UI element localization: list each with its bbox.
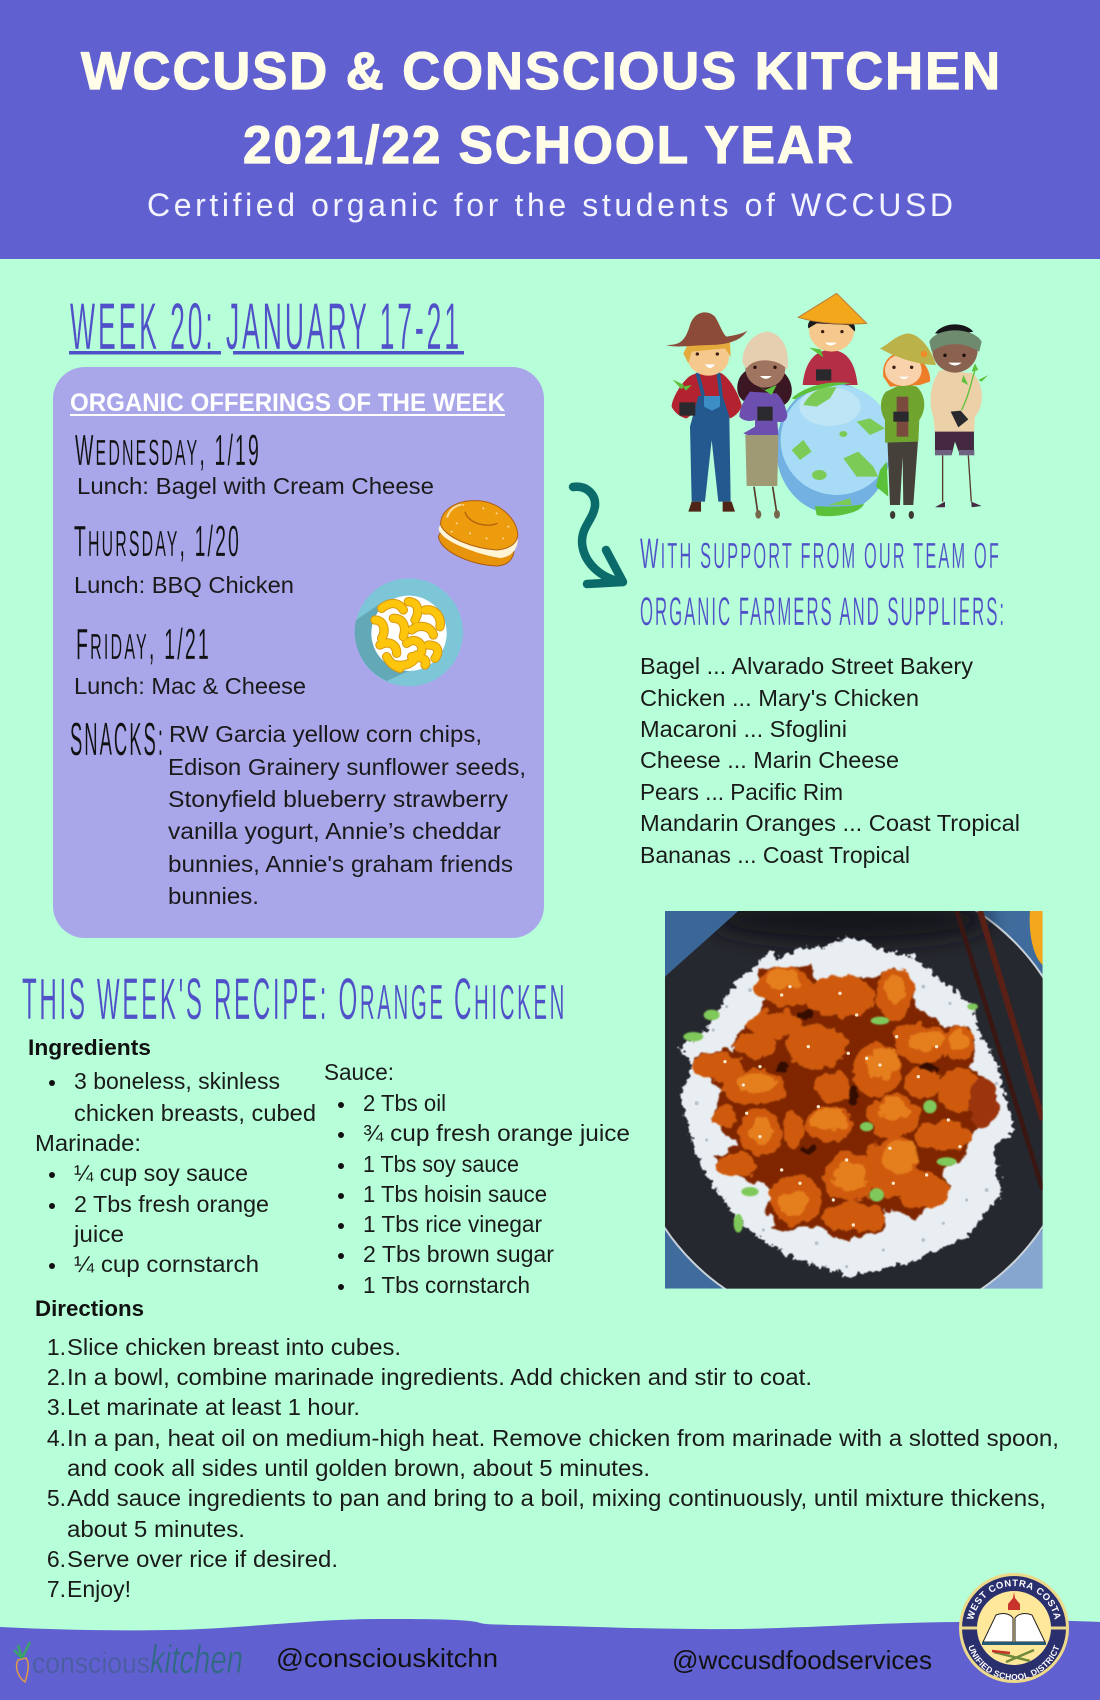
seal: West Contra Costa Unified School District — [959, 1573, 1069, 1683]
title — [81, 42, 1002, 175]
supplier list: Bananas ... Coast Tropical — [640, 842, 910, 868]
supplier list: Pears ... Pacific Rim — [640, 779, 843, 805]
handle: conscious kitchen: @consciouskitchn — [276, 1643, 498, 1673]
directions: 2. — [47, 1364, 66, 1390]
snacks list: Edison Grainery sunflower seeds, — [168, 754, 526, 780]
sauce column: 1 Tbs hoisin sauce — [363, 1181, 547, 1207]
directions — [35, 1296, 1059, 1602]
photo: orange chicken over rice — [665, 911, 1043, 1289]
snacks list: bunnies. — [168, 883, 259, 909]
logo: conscious kitchen: kitchen — [150, 1638, 243, 1682]
directions: Serve over rice if desired. — [67, 1546, 338, 1572]
snacks list: vanilla yogurt, Annie’s cheddar — [168, 818, 501, 844]
directions: 5. — [47, 1485, 66, 1511]
ingredients column: ¼ cup soy sauce — [74, 1160, 248, 1186]
snacks list — [168, 721, 526, 909]
directions: about 5 minutes. — [67, 1516, 245, 1542]
panel heading: ORGANIC OFFERINGS OF THE WEEK — [70, 389, 505, 417]
ingredients column: 2 Tbs fresh orange — [74, 1191, 269, 1217]
sauce column: 2 Tbs brown sugar — [363, 1241, 554, 1267]
Friday menu: Lunch: Mac & Cheese — [74, 673, 306, 699]
sauce column — [324, 1059, 630, 1298]
sauce column: Sauce: — [324, 1059, 394, 1085]
sauce column: 1 Tbs rice vinegar — [363, 1211, 542, 1237]
seal: West Contra Costa Unified School District: UNIFIED SCHOOL DISTRICT — [968, 1644, 1059, 1680]
supplier list: Macaroni ... Sfoglini — [640, 716, 847, 742]
supplier list: Cheese ... Marin Cheese — [640, 747, 899, 773]
Friday menu — [74, 620, 306, 699]
Thursday menu: THURSDAY, 1/20 — [74, 517, 241, 566]
person: farmer in overalls — [666, 312, 747, 512]
ingredients column: juice — [73, 1221, 124, 1247]
globe — [776, 382, 893, 516]
directions: Add sauce ingredients to pan and bring to a boil, mixing continuously, until mixture thickens, — [67, 1485, 1046, 1511]
week heading — [69, 289, 464, 363]
ingredients column — [28, 1035, 316, 1277]
sauce column: 1 Tbs cornstarch — [363, 1272, 530, 1298]
supplier list — [640, 653, 1020, 868]
ingredients column: ¼ cup cornstarch — [74, 1251, 259, 1277]
Wednesday menu — [75, 426, 434, 499]
sauce column: 2 Tbs oil — [363, 1090, 446, 1116]
supplier list: Mandarin Oranges ... Coast Tropical — [640, 810, 1020, 836]
ingredients column: chicken breasts, cubed — [74, 1100, 316, 1126]
seal: West Contra Costa Unified School District: WEST CONTRA COSTA — [966, 1580, 1060, 1620]
snacks list: RW Garcia yellow corn chips, — [169, 721, 482, 747]
recipe heading: THIS WEEK'S RECIPE: ORANGE CHICKEN — [22, 967, 567, 1032]
supplier list: Chicken ... Mary's Chicken — [640, 685, 919, 711]
Wednesday menu: Lunch: Bagel with Cream Cheese — [77, 473, 434, 499]
directions: Slice chicken breast into cubes. — [67, 1334, 401, 1360]
snacks list: bunnies, Annie's graham friends — [168, 851, 513, 877]
directions: 3. — [47, 1394, 66, 1420]
panel: organic offerings: SNACKS: — [70, 713, 165, 765]
header banner — [0, 0, 1100, 259]
snacks list: Stonyfield blueberry strawberry — [168, 786, 509, 812]
person: red shirt behind globe — [798, 293, 867, 385]
directions: In a pan, heat oil on medium-high heat. Remove chicken from marinade with a slotted spoon, — [67, 1425, 1059, 1451]
text: WEEK 20: JANUARY 17-21 — [70, 289, 462, 363]
arrow — [573, 487, 623, 584]
supplier list: Bagel ... Alvarado Street Bakery — [640, 653, 974, 679]
person: green headband — [929, 324, 988, 507]
sauce column: 1 Tbs soy sauce — [363, 1151, 519, 1177]
footer band — [0, 1619, 1100, 1700]
directions: 4. — [47, 1425, 66, 1451]
Friday menu: FRIDAY, 1/21 — [76, 620, 211, 669]
Wednesday menu: WEDNESDAY, 1/19 — [75, 426, 261, 475]
directions: In a bowl, combine marinade ingredients. Add chicken and stir to coat. — [67, 1364, 812, 1390]
ingredients column: Ingredients — [28, 1035, 151, 1060]
directions: 1. — [47, 1334, 66, 1360]
subtitle: Certified organic for the students of WCCUSD — [147, 187, 953, 223]
ingredients column: Marinade: — [35, 1130, 141, 1156]
icon: mac and cheese plate — [355, 578, 463, 686]
ingredients column: 3 boneless, skinless — [74, 1068, 280, 1094]
Thursday menu — [74, 517, 294, 598]
sauce column: ¾ cup fresh orange juice — [363, 1120, 630, 1146]
logo: conscious kitchen: conscious — [32, 1647, 150, 1680]
handle: food services: @wccusdfoodservices — [672, 1645, 932, 1675]
panel: organic offerings — [53, 367, 544, 938]
person: green hat and jacket — [880, 333, 936, 519]
person: beanie and skirt — [737, 332, 792, 519]
support heading — [640, 530, 1006, 634]
title: 2021/22 SCHOOL YEAR — [243, 116, 855, 175]
directions: and cook all sides until golden brown, about 5 minutes. — [67, 1455, 650, 1481]
directions: Enjoy! — [67, 1576, 131, 1602]
Thursday menu: Lunch: BBQ Chicken — [74, 572, 294, 598]
title: WCCUSD & CONSCIOUS KITCHEN — [81, 42, 1002, 101]
directions: 6. — [47, 1546, 66, 1572]
directions: Directions — [35, 1296, 144, 1321]
directions: 7. — [47, 1576, 66, 1602]
directions: Let marinate at least 1 hour. — [67, 1394, 360, 1420]
illustration: farmers around a globe — [666, 293, 988, 519]
icon: bagel — [438, 501, 518, 566]
logo: conscious kitchen — [14, 1638, 243, 1682]
